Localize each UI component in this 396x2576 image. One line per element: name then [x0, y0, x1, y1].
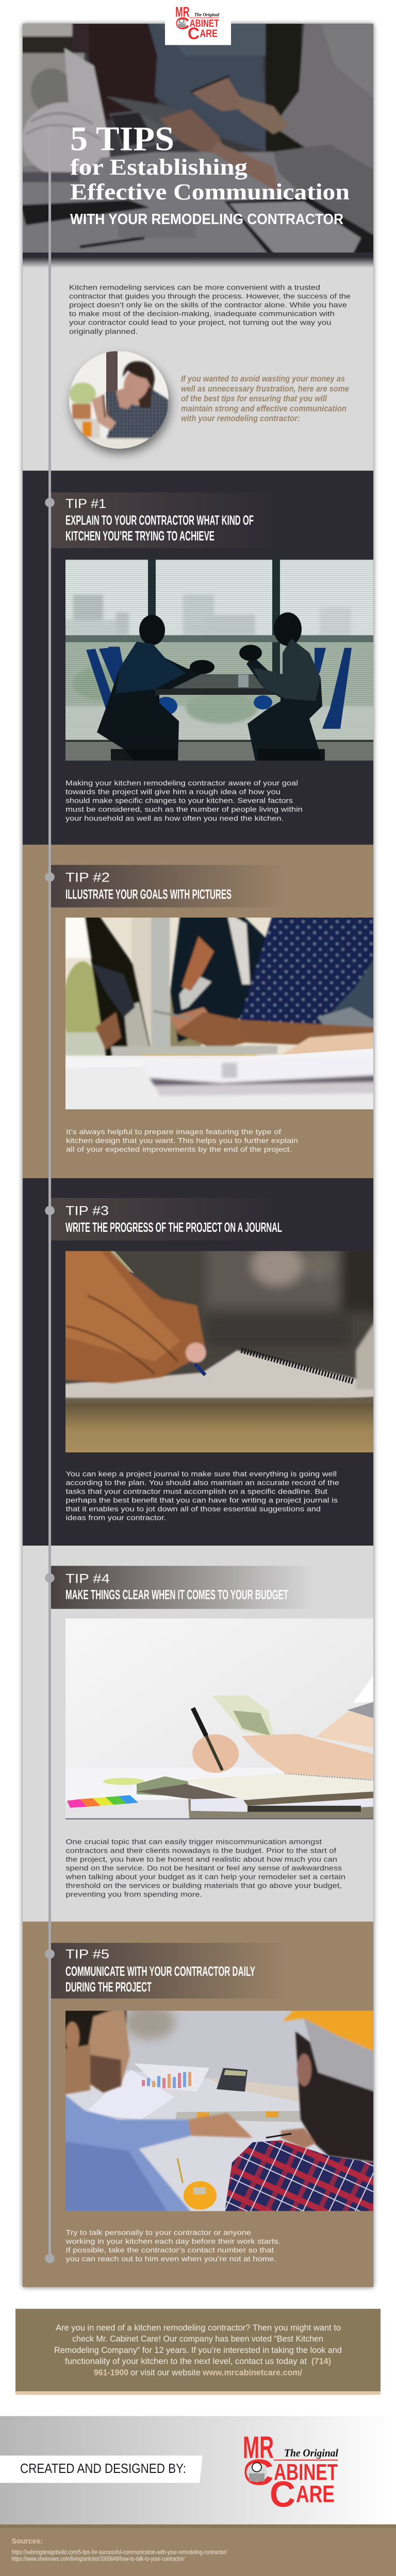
logo: Mr. Cabinet Care (top): C — [188, 24, 200, 43]
logo: Mr. Cabinet Care (footer): C — [243, 2452, 274, 2493]
tip 4 background — [23, 1546, 373, 1922]
panel: introduction — [23, 268, 373, 471]
timeline: vertical line with dots — [45, 126, 55, 2263]
italic lead-in callout: with your remodeling contractor: — [181, 413, 300, 423]
tip 4 paragraph: when talking about your budget as it can help your remodeler set a certain — [65, 1873, 345, 1881]
title — [70, 120, 350, 228]
logo: Mr. Cabinet Care (top): The Original — [194, 12, 219, 18]
tip 4 paragraph: preventing you from spending more. — [66, 1890, 202, 1899]
intro paragraph: Kitchen remodeling services can be more convenient with a trusted — [69, 283, 320, 292]
tip 4 paragraph — [65, 1838, 345, 1899]
tip 5 heading bar: TIP #5 — [65, 1948, 109, 1962]
circular photo shadow — [72, 357, 170, 453]
title: 5 TIPS — [70, 120, 174, 158]
tip 5 heading bar: DURING THE PROJECT — [65, 1980, 152, 1994]
call to action box: www.mrcabinetcare.com/ — [202, 2368, 302, 2377]
tip 4 photo: hands holding cash and writing — [65, 1619, 373, 1820]
tip 3 paragraph — [66, 1470, 339, 1521]
logo: Mr. Cabinet Care (top): ARE — [200, 27, 218, 40]
tip 4 paragraph: threshold on the services or building materials that go above your budget, — [66, 1882, 342, 1890]
panel: hero — [18, 19, 378, 268]
tip 1 paragraph — [65, 779, 303, 822]
intro paragraph: originally planned. — [69, 328, 138, 336]
hero bottom fade — [23, 252, 373, 268]
tip 1 paragraph: towards the project will give him a rough idea of how you — [65, 788, 280, 796]
tip 2 photo: team pointing at a laptop — [65, 918, 373, 1110]
tip 3 background — [23, 1178, 373, 1546]
title: for Establishing — [70, 154, 248, 180]
intro paragraph: project doesn’t only lie on the skills of the contractor alone. While you have — [69, 301, 347, 310]
intro paragraph: contractor that guides you through the process. However, the success of the — [69, 293, 351, 301]
tip 5 background — [23, 1922, 373, 2287]
tip 2 paragraph: It’s always helpful to prepare images featuring the type of — [66, 1127, 281, 1136]
sources footer: https://www.sheknows.com/living/articles/1005649/how-to-talk-to-your-contractor/ — [12, 2555, 185, 2563]
tip 5 paragraph: If possible, take the contractor’s contact number so that — [66, 2246, 274, 2254]
top logo box — [165, 0, 231, 45]
tip 3 paragraph: according to the plan. You should also maintain an accurate record of the — [66, 1479, 339, 1486]
panel: tip 2 — [23, 844, 378, 1178]
sources footer: https://sebringdesignbuild.com/5-tips-for-successful-communication-with-your-remodeling-contractor/ — [12, 2548, 227, 2555]
tip 4 paragraph: the project, you have to be honest and realistic about how much you can — [66, 1855, 337, 1863]
tip 1 heading bar: TIP #1 — [65, 497, 106, 511]
main panel drop shadow — [23, 24, 373, 2287]
call to action box: (714) — [311, 2357, 331, 2366]
panel: tip 5 — [23, 1922, 378, 2287]
call to action box: Are you in need of a kitchen remodeling contractor? Then you might want to — [56, 2324, 341, 2333]
tip 1 paragraph: your household as well as how often you need the kitchen. — [65, 814, 284, 822]
intro background — [23, 268, 373, 471]
intro paragraph: your contractor could lead to your project, not turning out the way you — [69, 319, 332, 327]
logo: Mr. Cabinet Care (footer): MR — [243, 2430, 274, 2465]
tip 3 paragraph: You can keep a project journal to make sure that everything is going well — [66, 1470, 337, 1478]
tip 2 paragraph: all of your expected improvements by the end of the project. — [66, 1145, 292, 1154]
italic lead-in callout: well as unnecessary frustration, here are some — [181, 384, 349, 394]
sources footer — [0, 2524, 396, 2576]
tip 5 paragraph: you can reach out to him even when you’re not at home. — [66, 2255, 276, 2263]
tip 1 paragraph: must be considered, such as the number of people living within — [65, 805, 303, 814]
tip 2 heading bar: ILLUSTRATE YOUR GOALS WITH PICTURES — [65, 888, 232, 902]
tip 2 heading bar — [51, 865, 289, 907]
credit ribbon: CREATED AND DESIGNED BY: — [20, 2462, 186, 2476]
tip 5 heading bar — [51, 1943, 289, 1998]
tip 3 photo: hand writing in a spiral notebook — [65, 1251, 373, 1453]
intro paragraph — [69, 283, 351, 336]
tip 5 paragraph: working in your kitchen each day before their work starts. — [65, 2237, 280, 2245]
logo: Mr. Cabinet Care (top) — [175, 4, 219, 43]
call to action box — [15, 2309, 381, 2395]
tip 5 photo: contractors reviewing plans at a desk — [65, 2010, 373, 2211]
tip 5 paragraph: Try to talk personally to your contractor or anyone — [66, 2228, 251, 2236]
title: WITH YOUR REMODELING CONTRACTOR — [70, 211, 343, 228]
tip 1 paragraph: should make specific changes to your kitchen. Several factors — [65, 796, 293, 805]
tip 4 paragraph: One crucial topic that can easily trigger miscommunication amongst — [66, 1838, 322, 1846]
tip 3 paragraph: perhaps the best benefit that you can have for writing a project journal is — [66, 1496, 338, 1504]
panel: tip 3 — [23, 1178, 384, 1546]
tip 4 paragraph: spend on the service. Do not be hesitant or feel any sense of awkwardness — [66, 1864, 342, 1872]
tip 3 paragraph: that it enables you to jot down all of those essential suggestions and — [66, 1505, 321, 1513]
tip 5 heading bar: COMMUNICATE WITH YOUR CONTRACTOR DAILY — [65, 1964, 255, 1979]
tip 1 background — [23, 471, 373, 844]
panel: tip 4 — [23, 1546, 373, 1922]
call to action box: Remodeling Company” for 12 years. If you’re interested in taking the look and — [54, 2346, 342, 2355]
intro paragraph: to make most of the decision-making, inadequate communication with — [69, 310, 335, 318]
circular photo: frustrated man with glasses — [69, 351, 169, 449]
logo: Mr. Cabinet Care (footer): C — [270, 2474, 295, 2515]
call to action box: functionality of your kitchen to the next level, contact us today at — [65, 2357, 307, 2366]
italic lead-in callout: If you wanted to avoid wasting your money as — [181, 374, 345, 384]
hero photo: contractors reviewing plans — [23, 24, 373, 252]
tip 5 paragraph — [65, 2228, 280, 2263]
credit ribbon — [0, 2455, 203, 2483]
italic lead-in callout: of the best tips for ensuring that you will — [181, 394, 327, 403]
tip 3 paragraph: ideas from your contractor. — [66, 1514, 166, 1521]
call to action box: check Mr. Cabinet Care! Our company has been voted “Best Kitchen — [72, 2334, 323, 2344]
tip 3 paragraph: tasks that your contractor must accomplish on a specific deadline. But — [66, 1487, 327, 1495]
tip 1 heading bar — [51, 493, 281, 548]
tip 2 heading bar: TIP #2 — [65, 871, 110, 885]
panel: tip 1 — [23, 471, 378, 844]
tip 1 heading bar: EXPLAIN TO YOUR CONTRACTOR WHAT KIND OF — [65, 514, 254, 528]
logo: Mr. Cabinet Care (top): MR — [175, 4, 190, 20]
tip 3 heading bar: TIP #3 — [65, 1205, 109, 1218]
tip 1 photo: two silhouettes talking at a table — [65, 560, 373, 760]
tip 4 paragraph: contractors and their clients nowadays is the budget. Prior to the start of — [66, 1846, 336, 1855]
call to action box: 961-1900 — [94, 2368, 128, 2377]
logo: Mr. Cabinet Care (footer) — [243, 2430, 339, 2515]
logo: Mr. Cabinet Care (top): ABINET — [190, 18, 219, 29]
tip 1 paragraph: Making your kitchen remodeling contractor aware of your goal — [65, 779, 298, 787]
tip 3 heading bar — [51, 1198, 282, 1241]
tip 1 heading bar: KITCHEN YOU’RE TRYING TO ACHIEVE — [65, 529, 214, 544]
logo: Mr. Cabinet Care (footer): The Original — [284, 2447, 339, 2459]
tip 4 heading bar — [51, 1566, 315, 1609]
logo: Mr. Cabinet Care (footer): ARE — [296, 2481, 335, 2507]
tip 4 heading bar: TIP #4 — [65, 1572, 110, 1586]
italic lead-in callout — [181, 374, 349, 423]
tip 2 paragraph — [66, 1127, 298, 1154]
sources footer: Sources: — [12, 2537, 43, 2546]
title: Effective Communication — [70, 179, 350, 205]
logo: Mr. Cabinet Care (footer): ABINET — [274, 2460, 338, 2485]
italic lead-in callout: maintain strong and effective communication — [181, 404, 346, 414]
tip 2 paragraph: kitchen design that you want. This helps you to further explain — [66, 1137, 298, 1145]
logo: Mr. Cabinet Care (top): C — [175, 14, 190, 33]
call to action box: or visit our website — [130, 2368, 201, 2377]
footer credit band — [0, 2416, 396, 2524]
tip 2 background — [23, 844, 373, 1178]
